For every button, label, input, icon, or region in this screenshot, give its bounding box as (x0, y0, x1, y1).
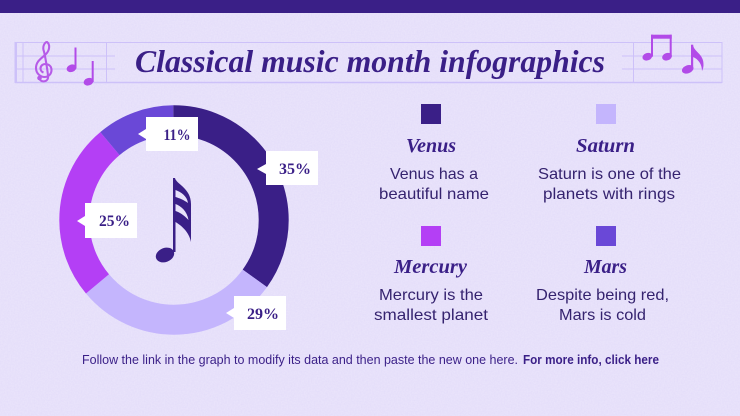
text: Venus description: Venus has a (390, 166, 478, 183)
legend: Saturn (538, 104, 681, 203)
heading: Venus: Venus (406, 135, 456, 157)
text: Mars description (536, 287, 669, 324)
callout: 29%: 29% (247, 306, 279, 323)
footer note: For more info, click here (523, 353, 659, 367)
callout: 25% (77, 203, 137, 238)
heading: Saturn: Saturn (576, 135, 635, 157)
callout: 35% (257, 151, 318, 185)
callout: 11% (138, 117, 198, 151)
text: Saturn description (538, 166, 681, 203)
top bar (0, 0, 740, 13)
text: Mercury description: Mercury is the (379, 287, 483, 304)
swatch: Mars (596, 226, 616, 246)
legend: Mercury (374, 226, 489, 324)
callout: 29% (226, 296, 286, 330)
swatch: Mercury (421, 226, 441, 246)
music staff (15, 42, 722, 82)
swatch: Venus (421, 104, 441, 124)
icon: central music note (154, 178, 191, 265)
callout: 11%: 11% (164, 127, 190, 144)
legend: Venus (379, 104, 489, 203)
segment: Mars 11% (74, 120, 274, 320)
legend: Mars (536, 226, 669, 324)
swatch: Saturn (596, 104, 616, 124)
text: Mars description: Despite being red, (536, 287, 669, 304)
segment: Saturn 29% (74, 120, 274, 320)
text: Mercury description (374, 287, 489, 324)
footer note: Follow the link in the graph to modify its data and then paste the new one here. (82, 353, 518, 367)
heading: Mercury: Mercury (393, 256, 467, 278)
donut chart (74, 117, 318, 330)
header (15, 35, 722, 87)
callout: 25%: 25% (99, 213, 130, 230)
icon: treble clef (36, 42, 52, 81)
callout: 35%: 35% (279, 161, 311, 178)
text: Saturn description: Saturn is one of the (538, 166, 681, 183)
icon: left quarter notes (66, 48, 94, 87)
text: Mercury description: smallest planet (374, 307, 489, 324)
icon: right beamed notes (641, 35, 704, 75)
text: Venus description: beautiful name (379, 186, 489, 203)
segment: Mercury 25% (74, 120, 274, 320)
text: Venus description (379, 166, 489, 203)
text: Saturn description: planets with rings (543, 186, 675, 203)
title: Classical music month infographics (135, 43, 605, 79)
heading: Mars: Mars (583, 256, 627, 278)
text: Mars description: Mars is cold (559, 307, 646, 324)
segment: Venus 35% (74, 120, 274, 320)
